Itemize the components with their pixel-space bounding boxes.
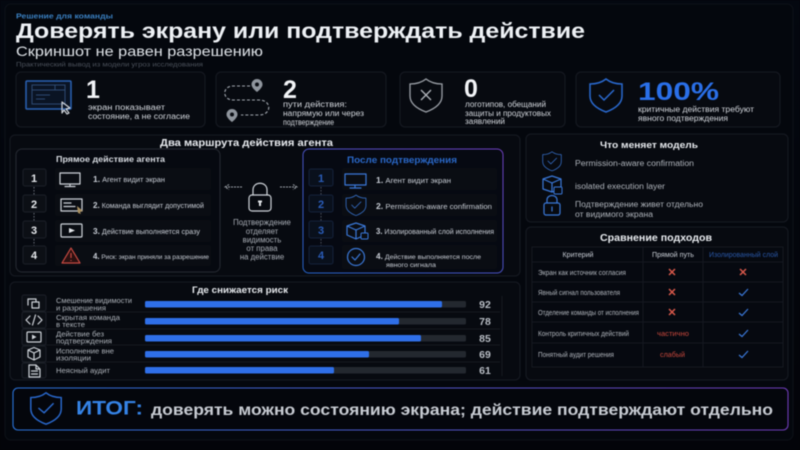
caption (88, 103, 191, 121)
source note: Практический вывод из модели угроз исследования (16, 62, 203, 68)
conclusion text: доверять можно состоянию экрана; действие подтверждают отдельно (151, 402, 773, 419)
risk row 2: Скрытая команда (56, 313, 121, 322)
icon: shield (31, 393, 61, 424)
caption (283, 100, 364, 127)
risk row 5: 61 (479, 365, 491, 377)
risk row 1: и разрешения (56, 304, 106, 312)
risk row 1: Смешение видимости (56, 296, 132, 305)
step 2: 2. Permission-aware confirmation (376, 202, 492, 211)
caption: защиты и продуктовых (465, 109, 551, 118)
item: confirmation: Permission-aware confirmation (575, 159, 694, 168)
subheading: Прямое действие агента (56, 154, 165, 164)
step numbers: 3 (31, 225, 37, 237)
step numbers: 2 (318, 199, 324, 211)
arrow right (280, 184, 297, 190)
step numbers: 1 (31, 173, 37, 185)
icon: shield with cross (410, 79, 442, 112)
isolated layer marks (739, 269, 748, 358)
heading: Что меняет модель (600, 140, 698, 151)
step 4 (342, 245, 497, 269)
risk row 5 (22, 363, 491, 378)
step 1: 1. Агент видит экран (376, 176, 451, 185)
eyebrow: Решение для команды (16, 12, 113, 20)
panel: two routes (10, 135, 520, 276)
value: 0 (464, 75, 478, 103)
step 3 (342, 220, 497, 242)
item: isolated layer: isolated execution layer (575, 182, 665, 191)
caption: пути действия: (283, 100, 347, 109)
row labels: Экран как источник согласия (538, 270, 626, 277)
header (16, 12, 585, 68)
step numbers: 3 (318, 225, 324, 237)
risk row 4 (22, 346, 491, 362)
risk row 2: 78 (479, 316, 491, 328)
direct path marks: частично (657, 331, 689, 338)
step numbers (309, 169, 333, 264)
caption: экран показывает (88, 103, 165, 112)
table header: Прямой путь (652, 251, 694, 259)
row labels: Отделение команды от исполнения (538, 310, 639, 317)
panel: what the model changes (526, 134, 788, 222)
icon: shield with check (590, 79, 622, 112)
caption (638, 105, 754, 123)
caption: заявлений (465, 117, 505, 126)
risk row 5: Неясный аудит (56, 366, 111, 375)
risk row 3: 85 (479, 333, 491, 345)
arrow left (225, 184, 242, 190)
label: ИТОГ: (76, 398, 143, 420)
panel: confirmed route (303, 149, 503, 273)
lock divider (225, 183, 297, 262)
step 4 (55, 245, 211, 266)
icon: dashed route (225, 79, 269, 122)
caption: подтверждение (283, 118, 334, 127)
caption: видимость (243, 236, 281, 244)
row labels (538, 270, 639, 359)
value: 1 (86, 76, 100, 104)
step 4: явного сигнала (386, 262, 436, 269)
item: isolated layer (543, 176, 665, 194)
step 4: 4. Риск: экран приняли за разрешение (93, 252, 209, 261)
heading: Где снижается риск (192, 285, 288, 296)
item: separate confirmation: Подтверждение живет отдельно (575, 200, 704, 209)
caption (465, 100, 551, 126)
step 3: 3. Изолированный слой исполнения (376, 227, 494, 236)
heading: Сравнение подходов (600, 233, 712, 244)
step 3: 3. Действие выполняется сразу (93, 227, 201, 236)
title: Доверять экрану или подтверждать действие (16, 19, 585, 43)
direct path marks (657, 269, 689, 359)
step 3 (55, 220, 211, 242)
KPI card: 1 screen (16, 72, 205, 127)
step numbers: 1 (318, 173, 324, 185)
conclusion banner (13, 388, 788, 430)
risk row 3: Действие без (56, 330, 105, 338)
value: 100% (638, 78, 719, 106)
step numbers (23, 169, 46, 264)
item: separate confirmation (544, 196, 704, 219)
step numbers: 4 (318, 250, 325, 262)
item: confirmation (543, 152, 694, 171)
table header (562, 251, 778, 259)
step numbers: 2 (31, 199, 37, 211)
step 1 (342, 168, 497, 190)
panel: where risk decreases (10, 282, 520, 380)
caption: напрямую или через (283, 109, 364, 118)
risk row 4: 69 (479, 349, 491, 361)
row labels: Явный сигнал пользователя (538, 289, 620, 297)
risk row 2: в тексте (56, 320, 85, 329)
caption: от права (246, 244, 278, 253)
risk row 3 (22, 329, 491, 346)
caption: состояние, а не согласие (88, 112, 191, 121)
risk row 4: изоляции (56, 354, 91, 362)
risk row 4: Исполнение вне (56, 346, 114, 356)
step 2 (55, 194, 211, 216)
row labels: Понятный аудит решения (538, 351, 614, 359)
step 2 (342, 194, 497, 216)
step connector (33, 187, 35, 246)
KPI card: 0 logos (400, 72, 565, 127)
risk row 1: 92 (479, 299, 491, 311)
subtitle: Скриншот не равен разрешению (16, 43, 263, 59)
table header: Критерий (562, 251, 594, 259)
item: separate confirmation: от видимого экрана (575, 210, 654, 219)
risk row 2 (22, 312, 491, 329)
caption: отделяет (246, 227, 279, 236)
caption: на действие (240, 252, 284, 262)
panel: direct route (16, 149, 220, 272)
comparison table (532, 247, 783, 367)
caption: логотипов, обещаний (465, 100, 546, 109)
subheading: После подтверждения (347, 155, 457, 166)
step 2: 2. Команда выглядит допустимой (93, 201, 204, 210)
icon: lock (249, 183, 271, 211)
step 4: 4. Действие выполняется после (376, 252, 481, 261)
KPI card: 100% (576, 72, 780, 127)
caption: явного подтверждения (638, 114, 728, 123)
divider (22, 296, 502, 376)
row labels: Контроль критичных действий (538, 330, 629, 338)
direct path marks: слабый (660, 351, 685, 359)
caption: Подтверждение (233, 218, 291, 227)
step numbers: 4 (31, 250, 38, 262)
heading: Два маршрута действия агента (160, 138, 333, 149)
risk row 3: подтверждения (56, 336, 112, 346)
risk row 1 (22, 295, 491, 312)
table header: Изолированный слой (709, 251, 778, 259)
step 1: 1. Агент видит экран (93, 175, 165, 184)
caption: критичные действия требуют (638, 105, 754, 114)
step 1 (55, 168, 211, 190)
icon: monitor with cursor (26, 81, 71, 114)
KPI card: 2 paths (216, 72, 386, 127)
panel: comparison (526, 227, 788, 380)
value: 2 (283, 76, 297, 104)
step connector (320, 187, 322, 246)
